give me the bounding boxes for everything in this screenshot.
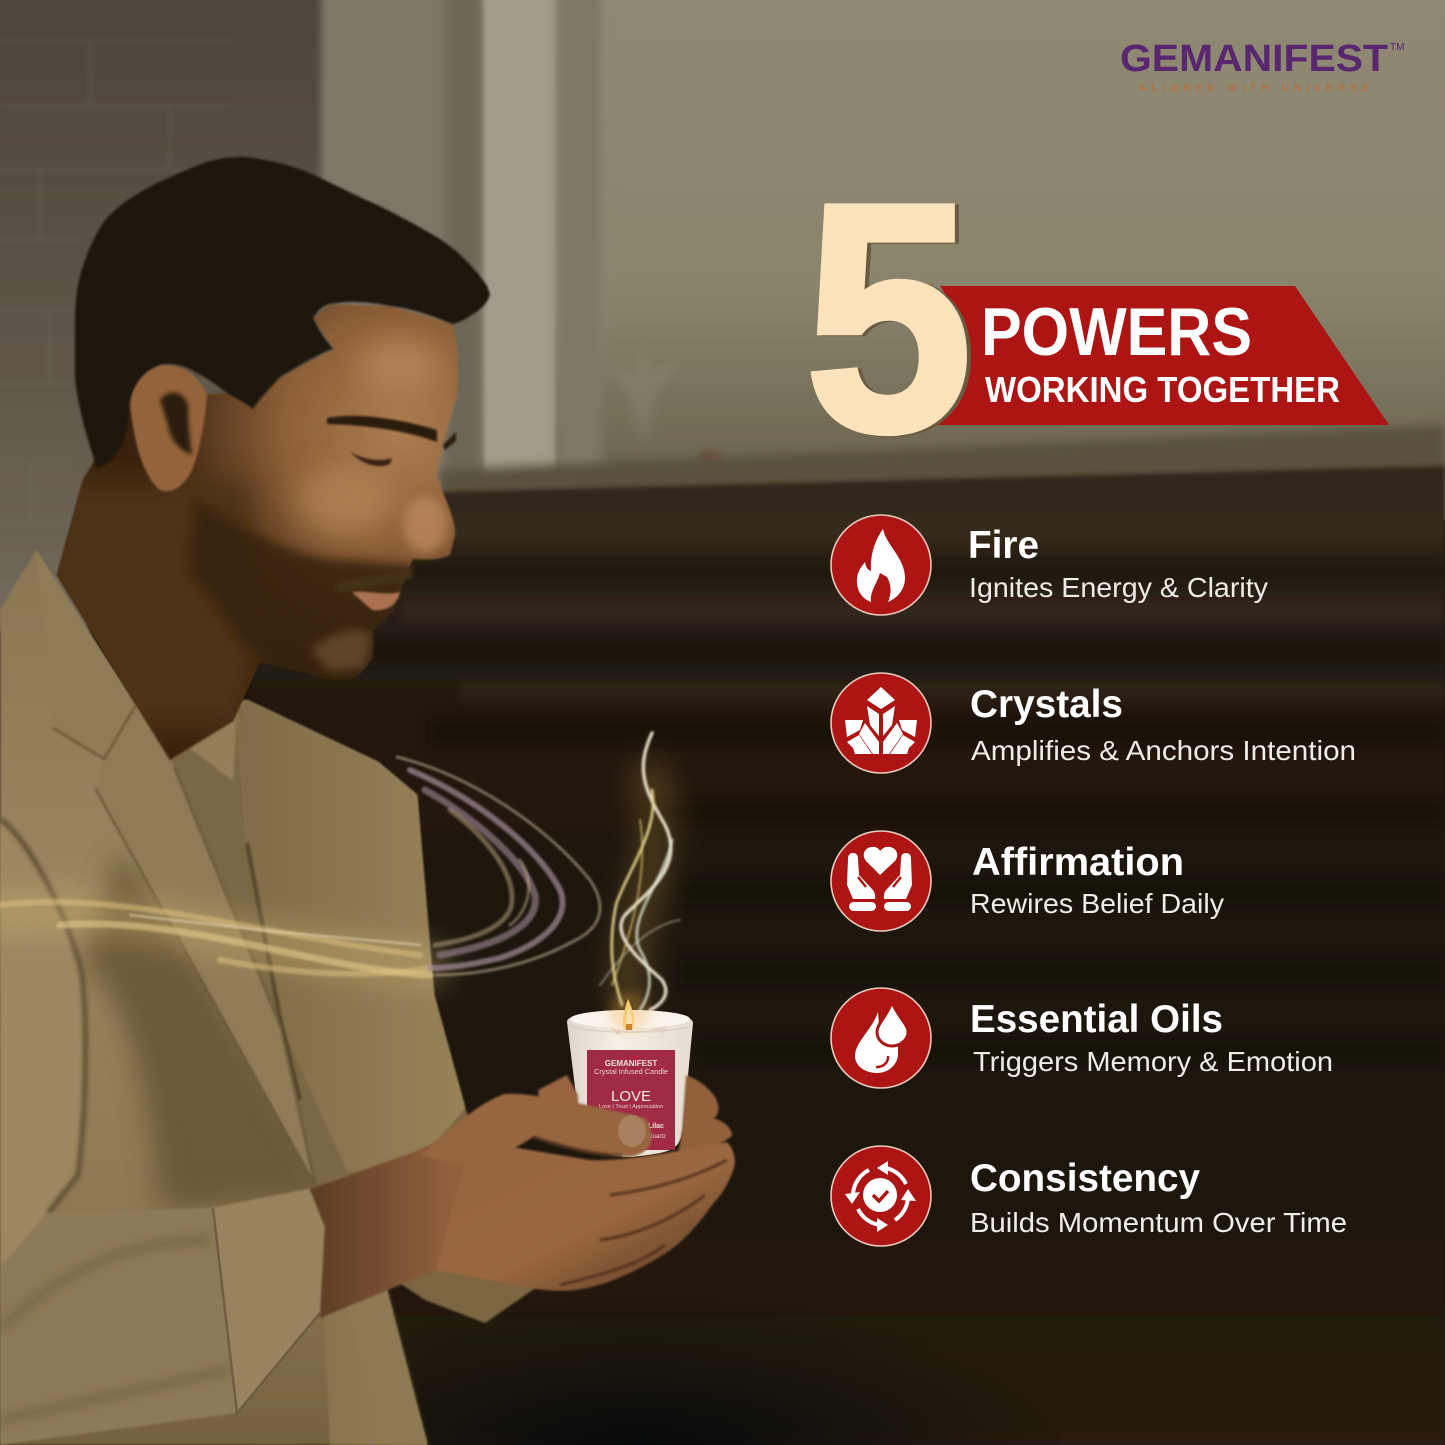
icon: crystal — [831, 673, 931, 773]
candle label: GEMANIFEST — [605, 1059, 657, 1068]
rear sleeve under the hands — [380, 1108, 540, 1323]
icon: heart in hands — [831, 831, 931, 931]
left arm — [0, 819, 85, 1270]
fire title: Fire — [968, 524, 1039, 567]
logo: ALIGNED WITH UNIVERSE — [1139, 83, 1371, 94]
neck and face — [40, 304, 458, 760]
essential oils title: Essential Oils — [970, 998, 1223, 1041]
item: affirmation — [831, 831, 1224, 931]
numeral 5: 5 — [804, 136, 973, 499]
item: fire — [831, 515, 1268, 615]
jacket body — [0, 550, 465, 1445]
rear fingers — [538, 1075, 578, 1110]
thumb shadow — [533, 1137, 622, 1156]
thumb nail — [618, 1115, 646, 1147]
finger creases — [560, 1160, 727, 1285]
sleeve — [0, 1189, 325, 1445]
candle label: Quartz — [648, 1134, 666, 1140]
cheek highlight — [297, 464, 393, 536]
lips — [352, 592, 400, 610]
affirmation title: Affirmation — [972, 841, 1184, 884]
wrist — [310, 1110, 533, 1318]
jacket right panel — [237, 700, 465, 1445]
brow — [327, 416, 437, 442]
icon: oil drops — [831, 988, 931, 1088]
candle label: LOVE — [611, 1088, 651, 1105]
item: consistency — [831, 1146, 1347, 1246]
hair — [75, 157, 490, 468]
icon: flame — [831, 515, 931, 615]
item: crystals — [831, 673, 1356, 773]
crystals title: Crystals — [970, 683, 1123, 726]
smoke — [600, 733, 680, 1010]
man portrait — [0, 157, 540, 1445]
essential oils text: Triggers Memory & Emotion — [973, 1046, 1333, 1077]
thumb — [420, 1094, 651, 1170]
numeral shadow edge: 5 — [808, 137, 977, 500]
logo: GEMANIFEST — [1120, 38, 1388, 80]
logo: TM — [1390, 42, 1404, 53]
moustache — [333, 565, 413, 592]
neck shadow — [40, 480, 260, 730]
flame — [623, 999, 634, 1029]
energy swirl — [0, 757, 600, 975]
beard — [189, 502, 412, 672]
ear — [130, 365, 207, 491]
consistency text: Builds Momentum Over Time — [970, 1207, 1347, 1238]
fingers and palm — [436, 1140, 735, 1291]
fire text: Ignites Energy & Clarity — [969, 572, 1268, 603]
eye — [350, 452, 392, 466]
candle label: Crystal Infused Candle — [594, 1067, 668, 1076]
icon: cycle check — [831, 1146, 931, 1246]
torso shadow — [82, 850, 330, 1210]
item: essential oils — [831, 988, 1333, 1088]
logo — [1120, 38, 1404, 94]
left lapel — [36, 550, 315, 1185]
candle label: Love | Trust | Appreciation — [599, 1104, 663, 1110]
crystals text: Amplifies & Anchors Intention — [971, 735, 1356, 766]
heading — [804, 136, 1389, 500]
consistency title: Consistency — [970, 1157, 1200, 1200]
t-shirt — [136, 705, 349, 1185]
nose highlight — [403, 497, 447, 553]
powers: POWERS — [981, 294, 1252, 370]
affirmation text: Rewires Belief Daily — [970, 888, 1224, 919]
hands — [420, 1075, 735, 1291]
candle — [567, 992, 693, 1157]
working together: WORKING TOGETHER — [985, 369, 1340, 410]
candle label — [587, 1050, 675, 1150]
forehead highlight — [358, 337, 442, 393]
candle label: Lilac — [648, 1123, 664, 1130]
red ribbon — [930, 286, 1389, 425]
